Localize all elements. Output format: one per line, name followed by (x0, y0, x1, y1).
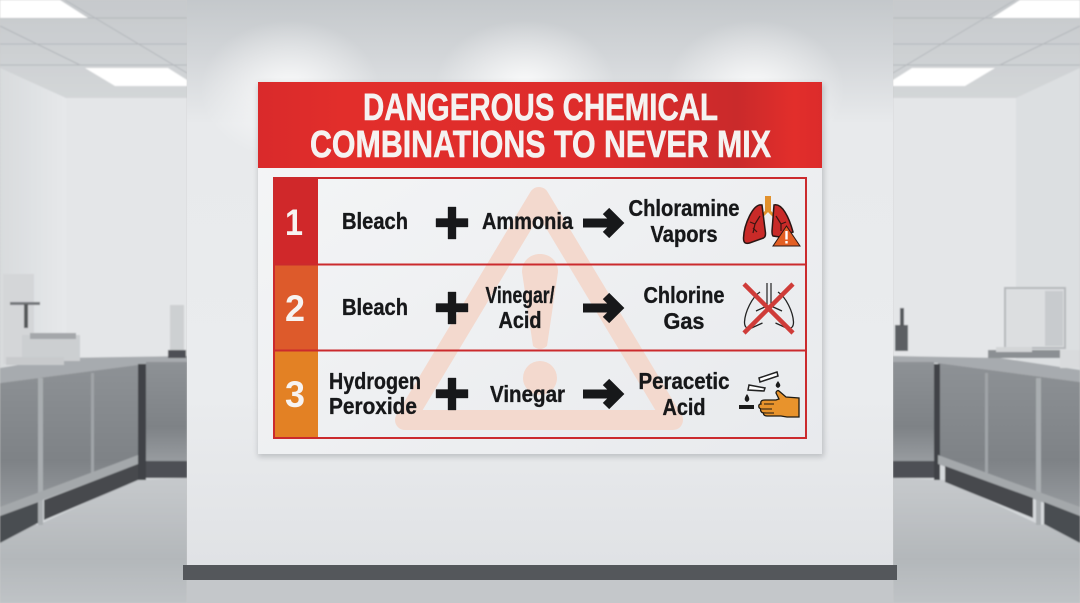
title: DANGEROUS CHEMICAL (363, 87, 718, 129)
reactant: Ammonia: Ammonia (482, 208, 574, 234)
number 2: 2 (285, 288, 305, 329)
reactant: Hydrogen Peroxide: Peroxide (329, 393, 417, 419)
plus (436, 207, 468, 239)
reactant: Vinegar/Acid: Acid (498, 307, 542, 333)
title banner (258, 82, 822, 168)
product: Peracetic Acid: Peracetic (638, 368, 730, 394)
product: Peracetic Acid: Acid (662, 394, 706, 420)
number column (274, 178, 318, 438)
product: Chloramine Vapors: Chloramine (628, 195, 740, 221)
background: left lab room (0, 0, 187, 603)
arrow (583, 296, 618, 320)
baseboard (183, 565, 897, 580)
product: Chlorine Gas: Chlorine (644, 282, 724, 308)
background: right lab room (893, 0, 1080, 603)
sign board (258, 82, 822, 454)
floor strip below wall (187, 579, 893, 603)
plus (436, 292, 468, 324)
icon: crossed-out lungs (744, 283, 794, 333)
reactant: Hydrogen Peroxide (329, 368, 421, 419)
central wall (187, 0, 893, 565)
row 3 (329, 368, 730, 420)
arrow (583, 382, 618, 406)
number 1 (274, 178, 318, 264)
icon: lungs with warning (744, 196, 800, 246)
icon: corrosive on hand (739, 372, 799, 417)
table frame (274, 178, 806, 438)
watermark: warning triangle (405, 197, 673, 420)
product: Peracetic Acid (638, 368, 730, 420)
reactant: Bleach: Bleach (342, 294, 408, 320)
product: Chlorine Gas (644, 282, 724, 334)
plus (436, 378, 468, 410)
reactant: Vinegar/Acid (486, 282, 555, 333)
reactant: Vinegar/Acid: Vinegar/ (486, 282, 555, 308)
reactant: Hydrogen Peroxide: Hydrogen (329, 368, 421, 394)
row 2 (342, 282, 724, 334)
number 2 (274, 265, 318, 350)
title (310, 87, 772, 166)
reactant: Vinegar: Vinegar (490, 381, 565, 407)
number 3 (274, 351, 318, 438)
product: Chloramine Vapors: Vapors (650, 221, 718, 247)
number 1: 1 (285, 202, 303, 243)
arrow (583, 211, 618, 235)
product: Chloramine Vapors (628, 195, 740, 247)
title: COMBINATIONS TO NEVER MIX (310, 124, 772, 166)
product: Chlorine Gas: Gas (664, 308, 704, 334)
sign shadow (258, 84, 824, 457)
row 1 (342, 195, 740, 247)
number 3: 3 (285, 374, 305, 415)
reactant: Bleach: Bleach (342, 208, 408, 234)
